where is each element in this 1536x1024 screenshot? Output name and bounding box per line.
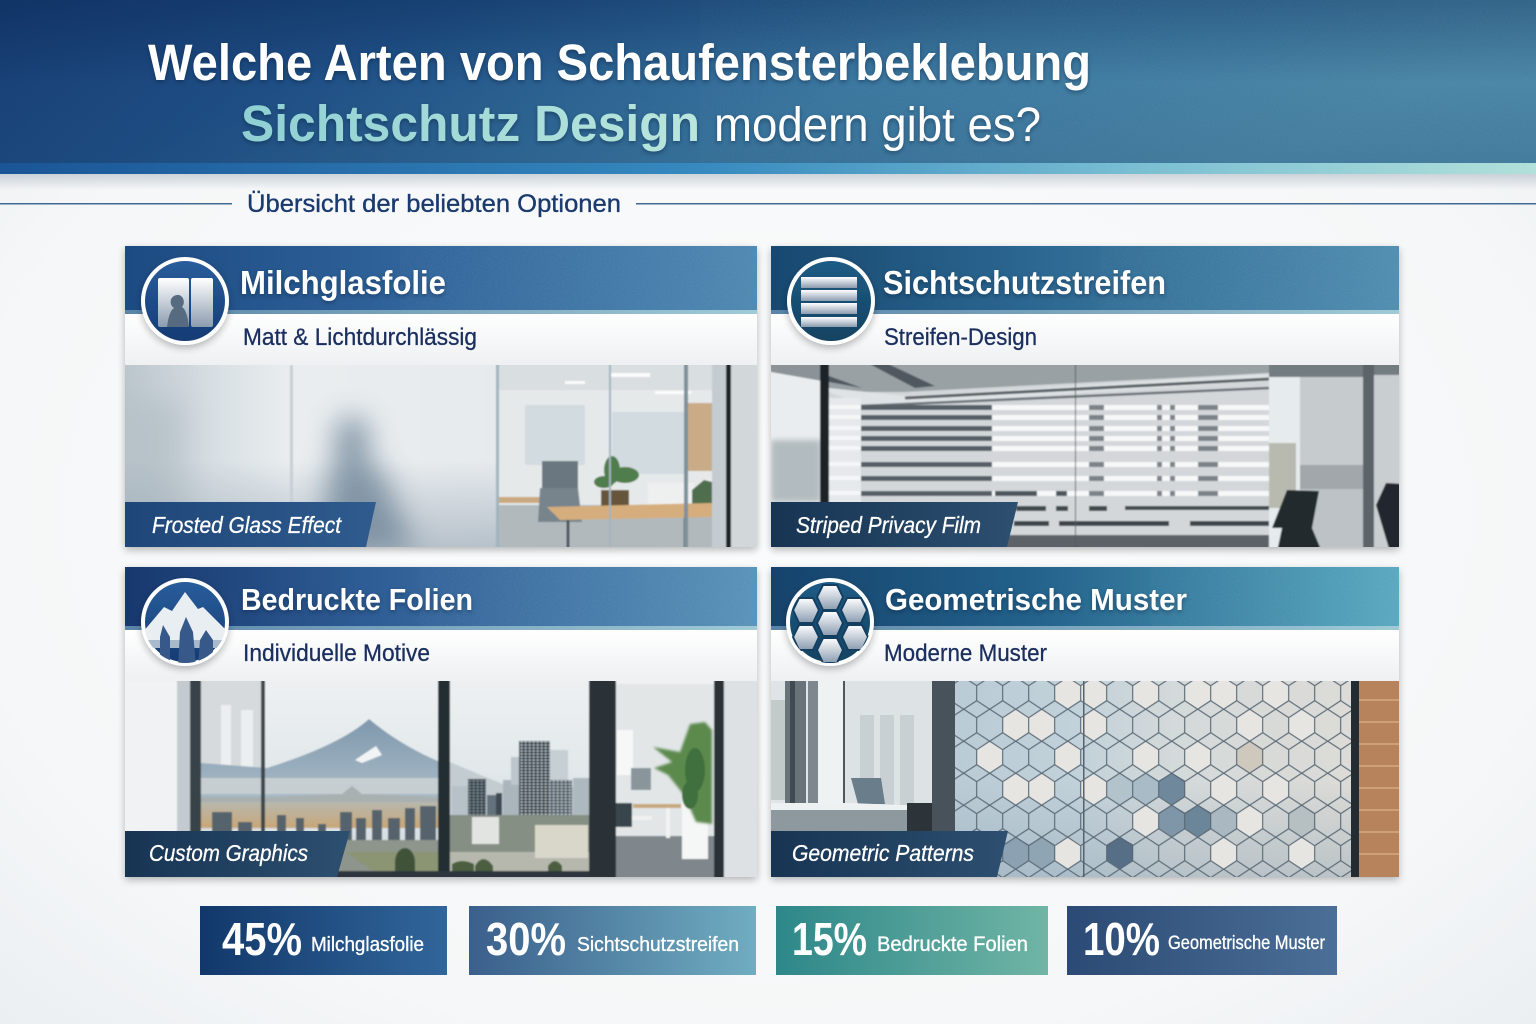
title: modern gibt es?: [714, 99, 1041, 152]
stat: 15% Bedruckte Folien: Bedruckte Folien: [877, 933, 1028, 956]
panel: Geometrische Muster: [771, 567, 1399, 877]
card 2 header band: [771, 246, 1399, 365]
stat: 15% Bedruckte Folien: [776, 906, 1048, 975]
caption: Geometric Patterns: Geometric Patterns: [792, 840, 974, 866]
caption: Frosted Glass Effect: [125, 502, 376, 547]
icon: hexagon pattern: [788, 580, 872, 664]
heading: Milchglasfolie: Milchglasfolie: [240, 264, 446, 301]
stat: 10% Geometrische Muster: 10%: [1083, 913, 1160, 965]
stat: 10% Geometrische Muster: [1067, 906, 1337, 975]
panel: Bedruckte Folien: [120, 567, 762, 882]
heading: Geometrische Muster: Geometrische Muster: [885, 582, 1187, 617]
subheading: Matt & Lichtdurchlässig: Matt & Lichtdurchlässig: [243, 324, 477, 351]
photo: frosted glass office: [120, 360, 761, 552]
stat: 45% Milchglasfolie: Milchglasfolie: [311, 934, 424, 956]
card 3 header band: [125, 567, 757, 681]
icon: privacy stripes: [789, 259, 873, 343]
subheading: Streifen-Design: Streifen-Design: [884, 324, 1037, 351]
subtitle with rule lines: Übersicht der beliebten Optionen: [247, 190, 621, 218]
photo: striped privacy film: [765, 360, 1405, 552]
subheading: Individuelle Motive: Individuelle Motive: [243, 640, 430, 667]
icon: mountain print: [143, 580, 228, 666]
stat: 45% Milchglasfolie: 45%: [222, 913, 302, 965]
heading: Bedruckte Folien: Bedruckte Folien: [241, 582, 473, 617]
card 4 background: [771, 567, 1399, 877]
icon: frosted window with person: [143, 259, 227, 343]
card 4 header band: [771, 567, 1399, 681]
card 3 background: [125, 567, 757, 877]
card 2 background: [771, 246, 1399, 547]
caption: Striped Privacy Film: [771, 502, 1018, 547]
stat: 45% Milchglasfolie: [200, 906, 447, 975]
stat: 15% Bedruckte Folien: 15%: [792, 913, 867, 965]
title: Welche Arten von Schaufensterbeklebung: [148, 34, 1091, 91]
stat: 30% Sichtschutzstreifen: [469, 906, 756, 975]
stat: 30% Sichtschutzstreifen: 30%: [486, 913, 566, 965]
heading: Sichtschutzstreifen: Sichtschutzstreifen: [883, 264, 1166, 301]
stat: 10% Geometrische Muster: Geometrische Muster: [1168, 933, 1326, 954]
caption: Frosted Glass Effect: Frosted Glass Effect: [152, 512, 342, 538]
stat: 30% Sichtschutzstreifen: Sichtschutzstreifen: [577, 934, 739, 956]
caption: Custom Graphics: [125, 831, 350, 877]
card 1 header band: [125, 246, 757, 365]
caption: Striped Privacy Film: Striped Privacy Film: [796, 512, 981, 538]
title: Sichtschutz Design: [241, 95, 700, 152]
photo: geometric pattern film: [771, 677, 1399, 877]
photo: custom mountain and city graphic: [120, 676, 762, 882]
card 1 background: [125, 246, 757, 547]
caption: Geometric Patterns: [771, 831, 1008, 877]
title: [148, 34, 1091, 152]
panel: Sichtschutzstreifen: [765, 246, 1405, 552]
caption: Custom Graphics: Custom Graphics: [149, 840, 308, 866]
subheading: Moderne Muster: Moderne Muster: [884, 640, 1047, 667]
panel: Milchglasfolie: [120, 246, 761, 552]
header banner: [0, 0, 1536, 190]
